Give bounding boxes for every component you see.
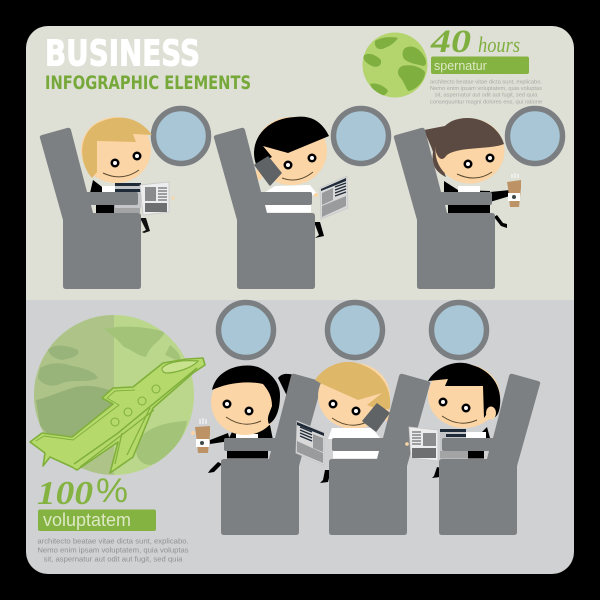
seat 2 xyxy=(214,128,315,289)
newspaper 1 xyxy=(140,182,174,215)
stat: 40 hours: 40 xyxy=(430,24,471,60)
text block: top description: consequuntur magni dolores eos, qui ratione xyxy=(430,99,542,105)
icon: large globe xyxy=(34,315,194,475)
text block: top description xyxy=(430,79,542,105)
person 5: blond man on phone, lower row xyxy=(315,362,390,483)
icon: small green globe xyxy=(362,32,428,98)
label bar: spernatur: spernatur xyxy=(434,59,487,73)
text block: bottom description: sit, aspernatur aut odit aut fugit, sed quia xyxy=(44,555,183,564)
icon: window 5 xyxy=(328,302,382,358)
person 1: blond man reading newspaper xyxy=(81,117,152,233)
icon: window 4 xyxy=(218,302,274,358)
person 4: woman with coffee, lower row xyxy=(208,366,296,473)
seat 3 xyxy=(394,128,495,289)
icon: window 6 xyxy=(432,302,486,358)
seat 4 xyxy=(221,374,322,535)
seat 1 xyxy=(40,128,141,289)
stat: 100%: 100 xyxy=(37,475,93,512)
text block: bottom description: architecto beatae vitae dicta sunt, explicabo. xyxy=(37,536,189,545)
person 3: woman with coffee xyxy=(424,118,510,228)
label bar: voluptatem: voluptatem xyxy=(43,510,131,530)
icon: green airplane xyxy=(30,358,205,473)
newspaper 2 xyxy=(320,176,348,219)
text block: bottom description xyxy=(37,536,189,564)
newspaper 4 xyxy=(405,427,438,461)
stat: 40 hours xyxy=(430,24,520,60)
seat 6 xyxy=(439,374,540,535)
icon: coffee cup 2 xyxy=(191,418,210,453)
label bar: spernatur xyxy=(431,56,529,74)
text block: bottom description: Nemo enim ipsam voluptatem, quia voluptas xyxy=(37,546,189,554)
panel: bottom grey background xyxy=(26,300,574,574)
text block: top description: Nemo enim ipsam voluptatem, quia voluptas xyxy=(430,86,542,92)
stat: 40 hours: hours xyxy=(478,32,520,57)
stat: 100%: % xyxy=(96,472,128,510)
text block: top description: sit, aspernatur aut odit aut fugit, sed quia xyxy=(435,93,538,99)
subtitle: INFOGRAPHIC ELEMENTS xyxy=(45,72,251,94)
icon: window 3 xyxy=(508,108,562,164)
text block: top description: architecto beatae vitae dicta sunt, explicabo. xyxy=(430,79,542,85)
person 2: woman on phone xyxy=(254,117,329,238)
stat: 100% xyxy=(37,472,128,512)
seat 5 xyxy=(329,374,430,535)
label bar: voluptatem xyxy=(38,510,156,531)
person 6: dark-haired man reading, lower row xyxy=(428,363,500,478)
icon: window 1 xyxy=(154,108,208,164)
icon: coffee cup 1 xyxy=(507,173,521,207)
newspaper 3 xyxy=(296,421,324,465)
title: BUSINESS xyxy=(45,34,200,74)
icon: window 2 xyxy=(334,108,388,164)
panel: top beige background xyxy=(26,26,574,300)
